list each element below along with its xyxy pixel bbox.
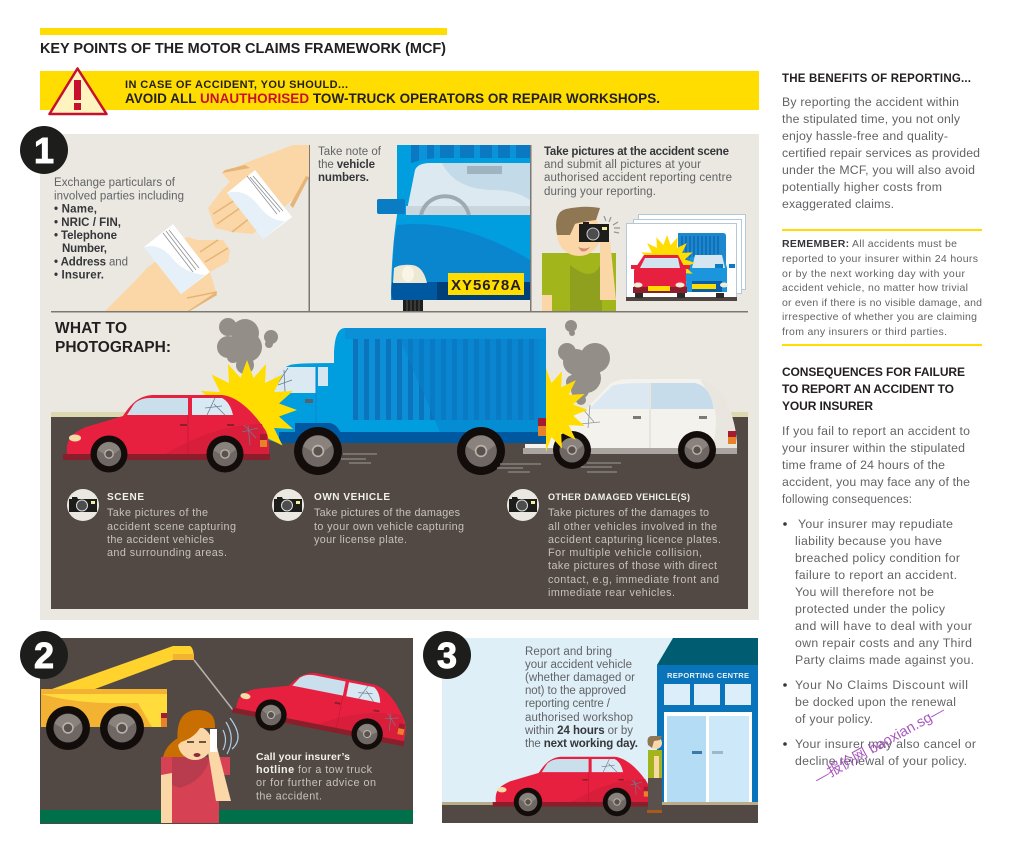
item: scene: the accident vehicles	[107, 534, 215, 546]
list: consequences bullets: Your insurer may repudiate	[798, 517, 953, 531]
item: own vehicle: your license plate.	[314, 534, 407, 546]
banner text	[125, 79, 660, 106]
text: vehicle numbers	[318, 146, 382, 184]
text: report and bring: not) to the approved	[525, 685, 626, 697]
list: consequences bullets: Your No Claims Discount will	[795, 678, 968, 692]
text: report and bring	[524, 646, 638, 750]
text: vehicle numbers: Take note of	[318, 146, 382, 158]
text: report and bring: your accident vehicle	[525, 659, 632, 671]
text: exchange particulars: • Telephone	[54, 230, 117, 242]
item: own vehicle	[272, 489, 464, 546]
text: vehicle numbers: numbers.	[318, 172, 369, 184]
item: other damaged vehicles: For multiple vehicle collision,	[548, 547, 702, 559]
text: report and bring: the next working day.	[525, 738, 638, 750]
item: scene: and surrounding areas.	[107, 547, 227, 559]
callout: remember: from any insurers or third parties.	[782, 326, 947, 338]
text: exchange particulars: Exchange particulars of	[54, 177, 176, 189]
title: KEY POINTS OF THE MOTOR CLAIMS FRAMEWORK (MCF)	[40, 41, 446, 57]
item: other damaged vehicles: Take pictures of the damages to	[548, 507, 709, 519]
panel: step 3	[423, 631, 758, 823]
sidebar: benefits of reporting: certified repair services as provided	[782, 146, 980, 160]
illustration: photo stack	[626, 214, 746, 301]
sidebar: consequences: following consequences:	[782, 494, 912, 506]
text: take pictures: during your reporting.	[544, 186, 656, 198]
item: own vehicle: OWN VEHICLE	[314, 492, 390, 503]
illustration: truck front with plate	[377, 145, 530, 311]
sidebar: benefits of reporting: under the MCF, you will also avoid	[782, 163, 975, 177]
road background	[51, 412, 748, 609]
callout: remember: accident vehicle, no matter how trivial	[782, 282, 968, 294]
item: other damaged vehicles: contact, e.g, immediate front and	[548, 574, 719, 586]
sidebar: benefits of reporting: enjoy hassle-free and quality-	[782, 129, 948, 143]
sidebar: consequences: If you fail to report an accident to	[782, 424, 970, 438]
list: consequences bullets: liability because you have	[795, 534, 942, 548]
step number 3: 3	[437, 635, 457, 676]
illustration: blue truck	[268, 328, 546, 475]
banner text: AVOID ALL UNAUTHORISED TOW-TRUCK OPERATORS OR REPAIR WORKSHOPS.	[125, 91, 660, 106]
sidebar: consequences: your insurer within the stipulated	[782, 441, 965, 455]
icon: camera	[272, 489, 304, 521]
number plate: XY5678A	[451, 277, 521, 294]
heading: what to photograph: PHOTOGRAPH:	[55, 339, 171, 356]
heading: what to photograph	[55, 320, 171, 356]
item: own vehicle: Take pictures of the damages	[314, 507, 461, 519]
list: consequences bullets: Your insurer may also cancel or	[795, 737, 976, 751]
text: call your insurer: Call your insurer’s	[256, 751, 350, 763]
sidebar: benefits of reporting	[782, 73, 980, 211]
text: report and bring: reporting centre /	[525, 698, 611, 710]
item: other damaged vehicles: immediate rear vehicles.	[548, 587, 675, 599]
text: report and bring: (whether damaged or	[525, 672, 635, 684]
illustration: reporting centre building	[657, 638, 758, 802]
item: other damaged vehicles	[507, 489, 721, 599]
illustration: right collision burst	[546, 368, 588, 452]
watermark: —报价网 baoxian.sg—	[812, 702, 948, 787]
callout: remember: or by the next working day with your	[782, 268, 966, 280]
sidebar: consequences	[782, 365, 970, 506]
warning banner	[40, 68, 759, 114]
illustration: left collision burst	[197, 360, 297, 460]
text: exchange particulars: • Name,	[54, 204, 97, 216]
item: other damaged vehicles: OTHER DAMAGED VEHICLE(S)	[548, 492, 690, 502]
sidebar: consequences: TO REPORT AN ACCIDENT TO	[782, 382, 954, 396]
callout: remember: REMEMBER: All accidents must be	[782, 238, 957, 250]
text: report and bring: Report and bring	[525, 646, 612, 658]
speed lines	[341, 454, 621, 472]
text: report and bring: authorised workshop	[525, 712, 633, 724]
item: other damaged vehicles: accident capturing licence plates.	[548, 534, 721, 546]
item: scene: accident scene capturing	[107, 521, 236, 533]
sidebar: consequences: accident, you may face any of the	[782, 475, 970, 489]
icon: warning triangle	[50, 68, 106, 114]
step number 1: 1	[34, 130, 54, 171]
sidebar: consequences: YOUR INSURER	[782, 399, 873, 413]
icon: camera	[507, 489, 539, 521]
text: exchange particulars: • Insurer.	[54, 270, 104, 282]
panel: step 1	[20, 126, 759, 620]
text: exchange particulars: Number,	[62, 243, 107, 255]
sidebar: benefits of reporting: the stipulated time, you not only	[782, 112, 961, 126]
icon: camera	[67, 489, 99, 521]
list: consequences bullets	[783, 517, 976, 768]
text: take pictures: Take pictures at the accident scene	[544, 146, 729, 158]
illustration: white car	[523, 379, 737, 469]
illustration: reporting centre building: REPORTING CENTRE	[667, 671, 749, 680]
step number 1	[20, 126, 68, 174]
list: consequences bullets: decline renewal of your policy.	[795, 754, 967, 768]
text: call your insurer: the accident.	[256, 790, 322, 802]
callout: remember: irrespective of whether you are claiming	[782, 311, 977, 323]
text: exchange particulars: • NRIC / FIN,	[54, 217, 121, 229]
illustration: left smoke	[217, 318, 278, 374]
heading: what to photograph: WHAT TO	[55, 320, 127, 337]
list: consequences bullets: You will therefore not be	[795, 585, 934, 599]
text: vehicle numbers: the vehicle	[318, 159, 375, 171]
illustration: red car at centre	[493, 757, 651, 816]
step number 3	[423, 631, 471, 679]
text: exchange particulars: • Address and	[54, 256, 128, 268]
list: consequences bullets: of your policy.	[795, 712, 873, 726]
sidebar: benefits of reporting: THE BENEFITS OF REPORTING...	[782, 73, 971, 85]
callout: remember: or even if there is no visible damage, and	[782, 297, 982, 309]
illustration: right smoke	[558, 320, 610, 405]
callout: remember	[782, 229, 982, 346]
step number 2: 2	[34, 635, 54, 676]
item: scene	[67, 489, 236, 559]
item: other damaged vehicles: take pictures of those with direct	[548, 560, 717, 572]
list: consequences bullets: own repair costs and any Third	[795, 636, 972, 650]
text: exchange particulars	[54, 177, 184, 282]
text: call your insurer: or for further advice on	[256, 777, 376, 789]
illustration: tow truck	[41, 646, 233, 750]
illustration: man with camera	[542, 207, 620, 311]
item: other damaged vehicles: all other vehicles involved in the	[548, 521, 717, 533]
list: consequences bullets: breached policy condition for	[795, 551, 960, 565]
sidebar: benefits of reporting: By reporting the accident within	[782, 95, 959, 109]
sidebar: benefits of reporting: potentially higher costs from	[782, 180, 942, 194]
text: take pictures	[544, 146, 732, 198]
list: consequences bullets: and will have to deal with your	[795, 619, 972, 633]
list: consequences bullets: failure to report an accident.	[795, 568, 957, 582]
illustration: standing man	[647, 736, 662, 813]
sidebar: consequences: CONSEQUENCES FOR FAILURE	[782, 365, 965, 379]
text: take pictures: authorised accident reporting centre	[544, 172, 732, 184]
text: call your insurer: hotline for a tow truck	[256, 764, 373, 776]
text: take pictures: and submit all pictures at your	[544, 159, 701, 171]
step number 2	[20, 631, 68, 679]
banner text: IN CASE OF ACCIDENT, YOU SHOULD...	[125, 79, 348, 91]
text: report and bring: within 24 hours or by	[524, 725, 633, 737]
item: own vehicle: to your own vehicle capturing	[314, 521, 464, 533]
text: call your insurer	[256, 751, 376, 802]
illustration: hands exchanging cards	[105, 145, 309, 311]
list: consequences bullets: protected under the policy	[795, 602, 946, 616]
illustration: woman on phone	[161, 710, 238, 823]
list: consequences bullets: be docked upon the renewal	[795, 695, 956, 709]
illustration: towed red car	[230, 659, 414, 757]
text: exchange particulars: involved parties including	[54, 190, 184, 202]
item: scene: SCENE	[107, 492, 144, 503]
callout: remember: reported to your insurer within 24 hours	[782, 253, 978, 265]
illustration: red car	[63, 395, 270, 472]
top accent bar	[40, 28, 447, 35]
item: scene: Take pictures of the	[107, 507, 208, 519]
list: consequences bullets: Party claims made against you.	[795, 653, 974, 667]
sidebar: consequences: time frame of 24 hours of the	[782, 458, 945, 472]
panel: step 2	[20, 631, 414, 824]
sidebar: benefits of reporting: exaggerated claims.	[782, 197, 894, 211]
